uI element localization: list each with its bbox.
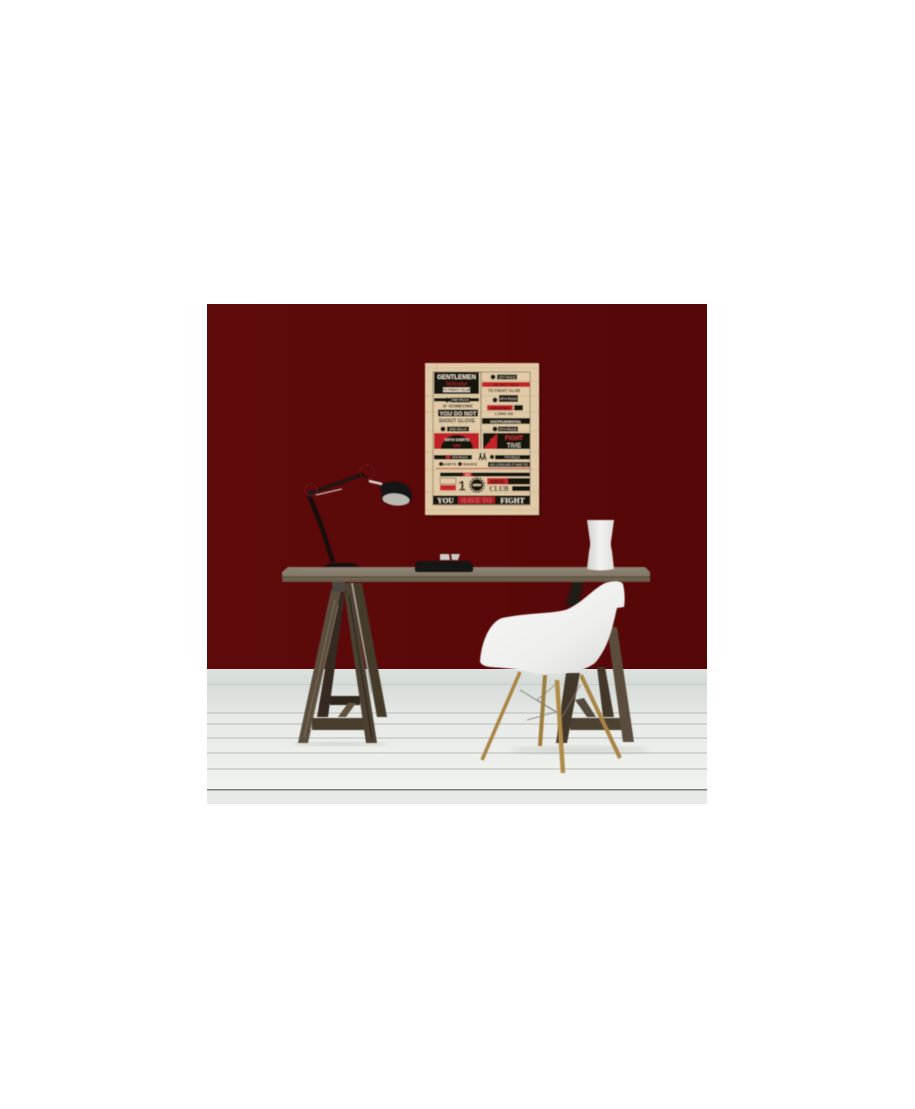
rule row with figures: SHOES — [463, 462, 477, 467]
footer band: you have to fight: YOU — [437, 496, 454, 505]
first night block: 1 — [458, 478, 466, 494]
rule 2: 2ND RULE — [451, 398, 469, 402]
rule stack right: 5TH RULE — [499, 427, 517, 431]
vase — [587, 520, 614, 570]
first night block: CLUB — [489, 485, 509, 493]
rule 2: YOU DO NOT — [440, 411, 477, 417]
panel: red dome — [434, 433, 479, 449]
room scene — [207, 304, 707, 804]
panel: gentlemen welcome: GENTLEMEN — [437, 374, 476, 381]
rule 1: TO FIGHT CLUB — [488, 388, 520, 393]
left trestle — [298, 582, 387, 743]
floor — [207, 684, 707, 804]
first night block: HAVE — [490, 479, 505, 485]
rule 1 — [482, 374, 530, 393]
footer band: you have to fight: HAVE TO — [461, 497, 493, 505]
panel: one fight time — [483, 433, 530, 452]
rule 2 — [434, 398, 479, 424]
footer band: you have to fight — [433, 496, 530, 505]
panel: gentlemen welcome — [434, 372, 479, 394]
rule row with figures — [434, 453, 531, 469]
panel: red dome: WITH SHIRTS — [445, 438, 470, 442]
bottom rule bar — [440, 472, 530, 477]
baseboard — [207, 669, 707, 713]
bottom rule bar: CC — [465, 473, 470, 477]
lamp base — [323, 563, 359, 570]
panel: one fight time: 1 — [489, 435, 497, 452]
books and glasses — [415, 554, 473, 572]
rule stack right — [482, 395, 530, 432]
rule 2: IF SOMEONE — [443, 404, 474, 410]
rule 1: 1ST RULE — [498, 375, 516, 379]
chair shell — [480, 581, 625, 674]
rule stack right: LONG AS — [495, 411, 513, 416]
panel: one fight time: FIGHT — [505, 436, 523, 442]
icon: gear badge — [470, 478, 484, 492]
rule stack right: WINDOWS — [490, 405, 510, 410]
wood board — [425, 363, 539, 515]
wall — [207, 304, 707, 670]
glasses — [440, 554, 460, 560]
footer band: you have to fight: FIGHT — [500, 496, 525, 505]
panel: red dome: OFF — [453, 444, 461, 448]
rule 1: DO NOT TALK — [493, 383, 519, 387]
rule row with figures: SHIRTS — [442, 462, 457, 467]
lamp shade — [369, 481, 412, 507]
right trestle — [556, 582, 634, 743]
chair — [480, 581, 625, 773]
panel: gentlemen welcome: Welcome — [446, 382, 468, 388]
chair legs — [482, 672, 620, 773]
panel: one fight time: TIME — [507, 444, 521, 450]
rule 2: SHOUT GLOVE — [439, 418, 476, 424]
lamp lower arm — [309, 495, 333, 562]
poster — [425, 363, 541, 517]
panel: gentlemen welcome: TO FIGHT CLUB — [442, 388, 471, 392]
table — [282, 567, 650, 743]
rule row with figures: 7TH RULE — [504, 456, 520, 460]
table top — [282, 567, 650, 582]
first night block — [440, 478, 530, 494]
rule stack right: INSTRUMENTAL — [490, 419, 522, 424]
frame lines — [433, 372, 530, 505]
poster shadow — [426, 365, 541, 517]
rule row with figures: AS LONG AS IT HAS TO — [490, 463, 528, 467]
lamp upper arm — [305, 465, 374, 496]
rule 3 — [441, 426, 469, 432]
lamp — [305, 465, 412, 570]
rule stack right: 4TH RULE — [500, 397, 518, 401]
rule 3: 3RD RULE — [449, 427, 467, 431]
book — [415, 561, 473, 572]
rule row with figures: 6TH RULE — [452, 456, 468, 460]
